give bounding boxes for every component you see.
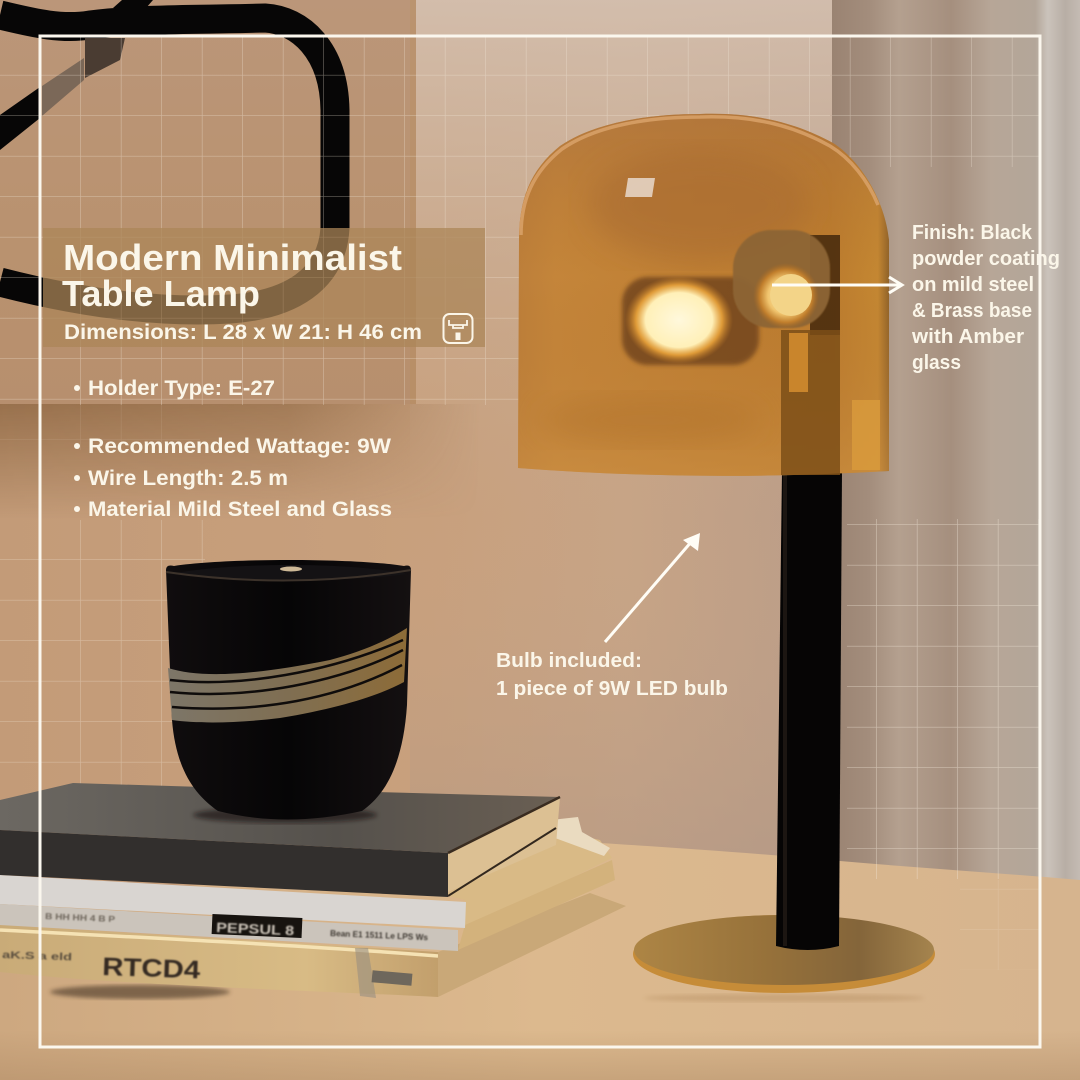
title bbox=[62, 237, 402, 314]
stack of books: B HH HH 4 B P bbox=[45, 912, 116, 924]
spec list: Wire Length: 2.5 m bbox=[88, 467, 288, 490]
black cup bbox=[166, 560, 411, 820]
stack of books: RTCD4 bbox=[102, 953, 201, 984]
callout: finish: on mild steel bbox=[912, 274, 1034, 296]
glass highlight bbox=[625, 178, 655, 197]
callout: finish: glass bbox=[912, 352, 961, 374]
lower rolled magazine bbox=[0, 925, 438, 997]
title: Modern Minimalist bbox=[63, 237, 402, 278]
dark book bbox=[0, 783, 560, 853]
spec list: Material Mild Steel and Glass bbox=[88, 498, 392, 521]
title backdrop panel bbox=[43, 228, 485, 347]
arrow: to bulb bbox=[772, 277, 902, 293]
cup shadow bbox=[193, 807, 377, 823]
callout: finish: with Amber bbox=[911, 326, 1024, 348]
page edges right bbox=[447, 802, 557, 892]
black stem bbox=[776, 470, 842, 950]
dimensions: Dimensions: L 28 x W 21: H 46 cm bbox=[64, 320, 422, 344]
cup gold band bbox=[168, 628, 407, 722]
spec list bbox=[74, 377, 392, 521]
callout: finish: & Brass base bbox=[912, 300, 1032, 322]
spec list: Holder Type: E-27 bbox=[88, 377, 275, 400]
arrow: bulb included bbox=[605, 533, 700, 642]
bulb glows bbox=[625, 276, 733, 364]
inner stem reflection bbox=[810, 235, 840, 335]
callout: finish bbox=[911, 222, 1060, 374]
amber shade bbox=[518, 114, 889, 476]
bulb housings bbox=[622, 277, 759, 365]
icon: lamp holder bbox=[444, 314, 472, 343]
stack of books: Bean E1 1511 Le LPS Ws bbox=[330, 928, 429, 942]
callout: finish: powder coating bbox=[912, 248, 1060, 270]
white magazine bbox=[0, 875, 466, 928]
table top bbox=[0, 843, 1080, 1080]
lamp bbox=[518, 114, 935, 1002]
stack of books bbox=[0, 783, 626, 999]
spec list: Recommended Wattage: 9W bbox=[88, 435, 391, 458]
background wall bbox=[0, 0, 832, 856]
stack of books: aK.S a eld bbox=[2, 950, 72, 963]
callout: bulb included: Bulb included: bbox=[496, 650, 642, 672]
stack of books: PEPSUL 8 bbox=[216, 919, 295, 938]
brass base bbox=[633, 915, 935, 993]
callout: bulb included: 1 piece of 9W LED bulb bbox=[496, 678, 728, 700]
curtain bbox=[832, 0, 1080, 885]
wall art with black curve bbox=[0, 0, 416, 404]
callout: finish: Finish: Black bbox=[912, 222, 1033, 244]
callout: bulb included bbox=[496, 650, 728, 700]
title: Table Lamp bbox=[62, 273, 260, 314]
